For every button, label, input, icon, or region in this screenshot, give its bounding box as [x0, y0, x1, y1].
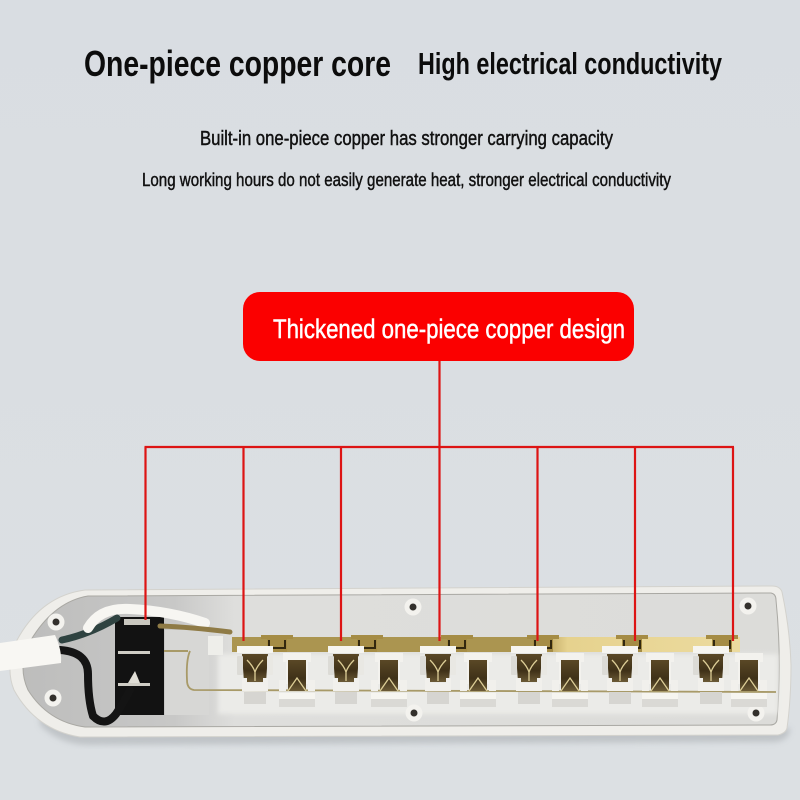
subtitle: carrying capacity: Built-in one-piece copper has stronger carrying capacity: [200, 128, 613, 150]
solder joint: [208, 636, 223, 655]
power strip photo illustration: [0, 586, 791, 745]
red connector lines: [144, 361, 734, 641]
switch bay panel: [165, 630, 209, 715]
lower thin copper rail: [187, 651, 776, 692]
screw posts: [44, 598, 764, 722]
subtitle: working hours: Long working hours do not easily generate heat, stronger electrical conductivity: [142, 170, 671, 190]
copper clips: [261, 635, 738, 652]
strip outer shell: [10, 586, 791, 737]
white and green wires: [62, 609, 230, 640]
strip inner cavity: [23, 593, 779, 727]
socket contacts: [237, 646, 767, 707]
black wire: [60, 650, 130, 722]
callout: thickened copper design: [243, 292, 634, 361]
rocker switch: [115, 617, 164, 715]
title: one-piece copper core: One-piece copper core: [84, 43, 391, 84]
socket zone highlight: [218, 654, 778, 714]
white power cord: [0, 635, 61, 671]
callout: thickened copper design: Thickened one-piece copper design: [273, 314, 625, 344]
strip shadow: [40, 715, 790, 745]
copper bar: [232, 637, 740, 652]
